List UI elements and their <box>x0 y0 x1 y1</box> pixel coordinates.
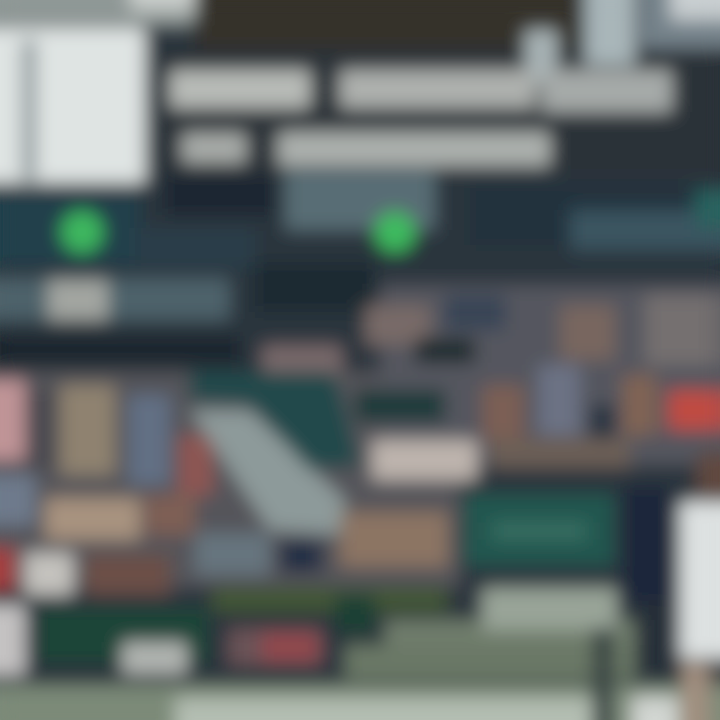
banner: green advertising board <box>464 494 614 566</box>
court: pale green ground <box>0 588 720 720</box>
stadium roof and windows <box>0 0 720 230</box>
title: blurred heading blocks <box>170 70 672 166</box>
crowd: spectators <box>0 285 720 675</box>
icon: left green light <box>61 211 103 253</box>
band: upper stand <box>0 185 720 365</box>
icon: right green light <box>375 212 415 252</box>
figure: player and official <box>592 452 720 720</box>
barrier: dark green courtside boards <box>38 588 447 674</box>
